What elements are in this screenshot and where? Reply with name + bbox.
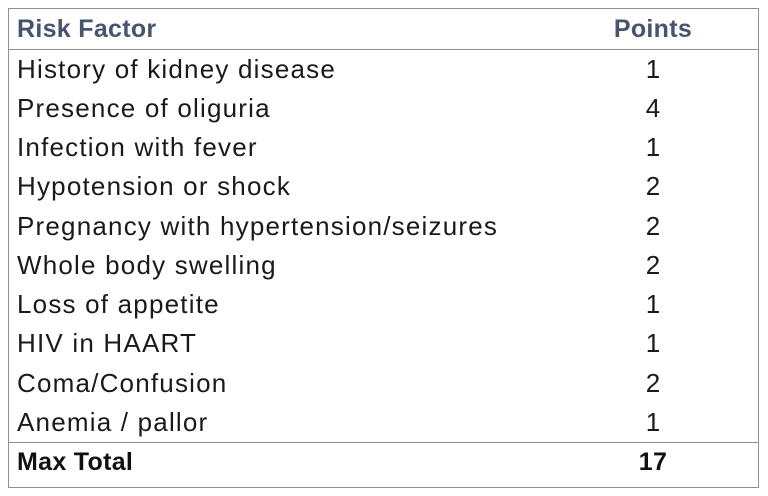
row: infection: 1: [646, 132, 660, 162]
footer row: max total: 17: [639, 448, 667, 476]
row: appetite: 1: [646, 289, 660, 319]
row: kidney disease: 1: [646, 54, 660, 84]
row: HIV: [17, 328, 660, 358]
row: anemia: 1: [646, 407, 660, 437]
row: coma: 2: [646, 368, 660, 398]
row: hypotension: 2: [646, 171, 660, 201]
row: oliguria: Presence of oliguria: [17, 93, 271, 123]
row: pregnancy: 2: [646, 211, 660, 241]
row: infection: [17, 132, 660, 162]
header row: Points: [614, 15, 692, 43]
row: HIV: 1: [646, 328, 660, 358]
row: oliguria: 4: [646, 93, 660, 123]
footer row: max total: [9, 442, 758, 487]
row: pregnancy: Pregnancy with hypertension/seizures: [17, 211, 498, 241]
row: hypotension: Hypotension or shock: [17, 171, 291, 201]
header row: [9, 9, 758, 50]
footer row: max total: Max Total: [17, 448, 133, 476]
row: HIV: HIV in HAART: [17, 328, 197, 358]
row: swelling: [17, 250, 660, 280]
row: anemia: [17, 407, 660, 437]
row: appetite: [17, 289, 660, 319]
row: kidney disease: History of kidney disease: [17, 54, 336, 84]
row: infection: Infection with fever: [17, 132, 258, 162]
row: anemia: Anemia / pallor: [17, 407, 208, 437]
row: hypotension: [17, 171, 660, 201]
row: kidney disease: [17, 54, 660, 84]
row: coma: Coma/Confusion: [17, 368, 227, 398]
row: swelling: 2: [646, 250, 660, 280]
row: appetite: Loss of appetite: [17, 289, 220, 319]
row: coma: [17, 368, 660, 398]
row: oliguria: [17, 93, 660, 123]
header row: Risk Factor: [17, 15, 156, 43]
row: swelling: Whole body swelling: [17, 250, 277, 280]
